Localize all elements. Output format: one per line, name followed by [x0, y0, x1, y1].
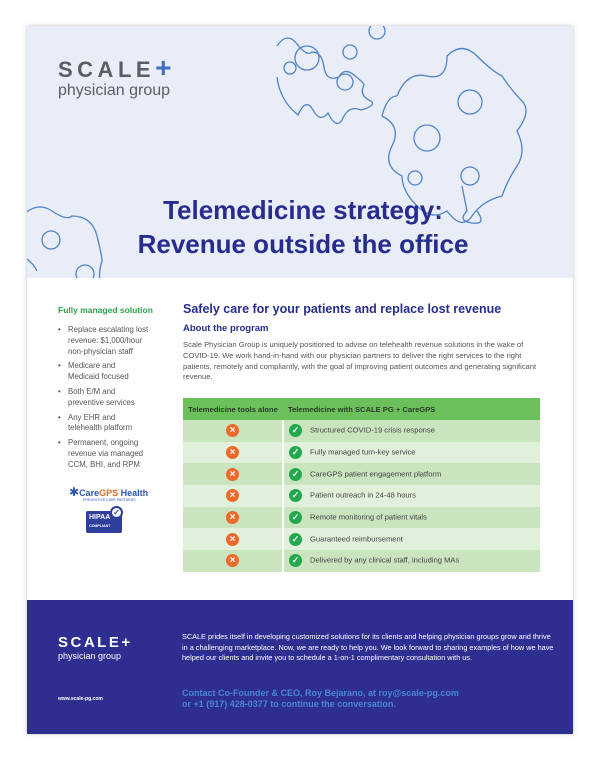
footer logo: [58, 634, 133, 661]
sidebar list: Both E/M and: [68, 387, 115, 396]
comparison table: Telemedicine with SCALE PG + CareGPS: [288, 404, 435, 414]
comparison table: ×: [230, 447, 235, 458]
comparison table: [183, 398, 540, 572]
comparison table: ×: [230, 490, 235, 501]
footer text: SCALE prides itself in developing customized solutions for its clients and helping physician groups grow and thrive in a challenging marketplace. Now, we are ready to help you. We look forward to sharing examples of how we have helped our clients and invite you to schedule a 1-on-1 complimentary consultation with us.: [182, 632, 553, 662]
comparison table: Structured COVID-19 crisis response: [310, 426, 435, 435]
comparison table: ×: [230, 555, 235, 566]
logo: CareGPS: ✱CareGPS Health: [69, 485, 148, 499]
badge: HIPAA: COMPLIANT: [89, 524, 110, 528]
comparison table: ✓: [292, 534, 299, 544]
title: Telemedicine strategy:: [163, 195, 443, 225]
sidebar list: revenue via managed: [68, 449, 143, 458]
sidebar list: preventive services: [68, 398, 135, 407]
comparison table: ✓: [292, 425, 299, 435]
sidebar list: Medicaid focused: [68, 372, 129, 381]
title: Revenue outside the office: [138, 229, 468, 259]
sidebar list: Medicare and: [68, 361, 115, 370]
sidebar list: Permanent, ongoing: [68, 438, 138, 447]
comparison table: ✓: [292, 490, 299, 500]
sidebar: [58, 305, 153, 469]
footer band: [27, 600, 573, 734]
contact: or +1 (917) 428-0377 to continue the conversation.: [182, 699, 396, 709]
comparison table: Delivered by any clinical staff, including MAs: [310, 556, 459, 565]
intro text: Scale Physician Group is uniquely positioned to advise on telehealth revenue solutions in the wake of COVID-19. We work hand-in-hand with our physician partners to deliver the right services to the right patients, remotely and compliantly, with the goal of improving patient outcomes and generating significant revenue.: [183, 340, 536, 381]
contact: [182, 688, 459, 709]
contact: Contact Co-Founder & CEO, Roy Bejarano, at roy@scale-pg.com: [182, 688, 459, 698]
main heading: Safely care for your patients and replace lost revenue: [183, 302, 501, 316]
subheading: About the program: [183, 323, 268, 334]
sidebar list: Any EHR and: [68, 413, 115, 422]
comparison table: ✓: [292, 555, 299, 565]
comparison table: Telemedicine tools alone: [188, 404, 278, 414]
comparison table: ✓: [292, 512, 299, 522]
badge: HIPAA: ✓: [113, 508, 120, 517]
logo: SCALE+: [58, 52, 171, 83]
virus decorations: [27, 26, 527, 278]
footer logo: SCALE+: [58, 634, 133, 651]
sidebar list: non-physician staff: [68, 347, 133, 356]
footer logo: physician group: [58, 651, 121, 661]
comparison table: Remote monitoring of patient vitals: [310, 513, 427, 522]
comparison table: ✓: [292, 447, 299, 457]
comparison table: Patient outreach in 24-48 hours: [310, 491, 416, 500]
comparison table: Guaranteed reimbursement: [310, 534, 403, 543]
comparison table: ×: [230, 512, 235, 523]
text: PREVENTIVE CARE PARTNERS: [83, 498, 136, 502]
footer url: www.scale-pg.com: [58, 696, 103, 702]
sidebar list: Replace escalating lost: [68, 325, 148, 334]
sidebar list: revenue: $1,000/hour: [68, 336, 142, 345]
sidebar list: CCM, BHI, and RPM: [68, 460, 140, 469]
comparison table: ✓: [292, 469, 299, 479]
sidebar list: telehealth platform: [68, 423, 132, 432]
title: [138, 195, 468, 259]
sidebar heading: Fully managed solution: [58, 305, 153, 315]
sidebar list: [58, 325, 148, 469]
comparison table: CareGPS patient engagement platform: [310, 469, 441, 478]
badge: HIPAA: [86, 511, 122, 533]
comparison table: ×: [230, 469, 235, 480]
logo: [58, 52, 171, 99]
comparison table: ×: [230, 425, 235, 436]
comparison table: Fully managed turn-key service: [310, 448, 416, 457]
header band: [27, 26, 573, 278]
badge: HIPAA: HIPAA: [89, 514, 110, 521]
comparison table: ×: [230, 534, 235, 545]
logo: physician group: [58, 82, 170, 99]
